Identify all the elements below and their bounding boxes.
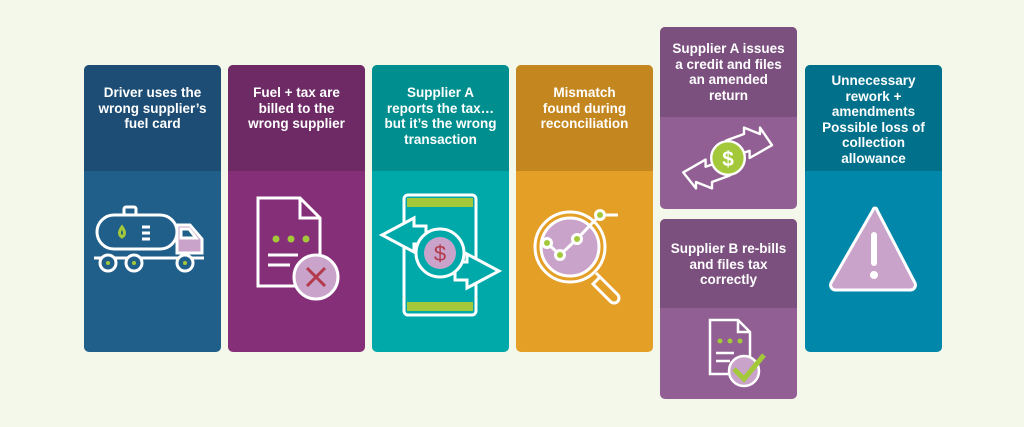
header 7: collection — [842, 135, 905, 150]
icon: fuel truck — [94, 206, 204, 272]
card 5: supplier A issues credit — [660, 27, 797, 209]
header 3: reports the tax… — [387, 100, 494, 116]
card 4: mismatch found — [516, 65, 653, 352]
header 4: reconciliation — [541, 116, 628, 131]
header 2 — [228, 65, 365, 171]
card 6: supplier B re-bills — [660, 219, 797, 399]
header 5: return — [709, 88, 748, 102]
header 4: found during — [543, 100, 626, 116]
header 3 — [372, 65, 509, 171]
header 1: fuel card — [124, 116, 181, 131]
icon: money exchange arrows — [682, 126, 774, 190]
header 2: wrong supplier — [248, 116, 345, 131]
header 5: an amended — [689, 72, 768, 87]
header 5 — [660, 27, 797, 117]
header 7: allowance — [841, 150, 906, 166]
icon: magnifier with chart — [534, 209, 620, 304]
card 1: driver uses wrong card — [84, 65, 221, 352]
icon: phone with money arrows — [378, 194, 502, 316]
header 4 — [516, 65, 653, 171]
header 1: Driver uses the — [104, 85, 201, 100]
header 1: wrong supplier’s — [98, 100, 206, 116]
header 3: transaction — [404, 132, 477, 146]
header 6 — [660, 219, 797, 308]
header 5: a credit and files — [675, 56, 782, 72]
header 6: and files tax — [689, 256, 768, 272]
header 3: Supplier A — [407, 85, 474, 100]
header 7: rework + — [846, 88, 901, 104]
icon: invoice with X — [256, 196, 340, 300]
icon: phone with money arrows: $ — [434, 241, 446, 266]
icon: warning triangle — [829, 206, 917, 292]
icon: money exchange arrows: $ — [722, 148, 734, 171]
card 3: supplier A reports tax — [372, 65, 509, 352]
card 7: consequences — [805, 65, 942, 352]
header 7: Possible loss of — [822, 120, 925, 134]
header 7: Unnecessary — [831, 73, 916, 88]
header 4: Mismatch — [553, 85, 616, 100]
header 1 — [84, 65, 221, 171]
header 2: billed to the — [259, 100, 334, 116]
icon: document with check — [708, 318, 766, 388]
header 7: amendments — [832, 104, 915, 119]
header 6: Supplier B re-bills — [671, 241, 786, 256]
header 7 — [805, 65, 942, 171]
header 3: but it’s the wrong — [384, 116, 496, 131]
header 5: Supplier A issues — [672, 41, 785, 56]
card 2: billed to wrong supplier — [228, 65, 365, 352]
header 6: correctly — [700, 272, 757, 287]
header 2: Fuel + tax are — [253, 85, 340, 100]
